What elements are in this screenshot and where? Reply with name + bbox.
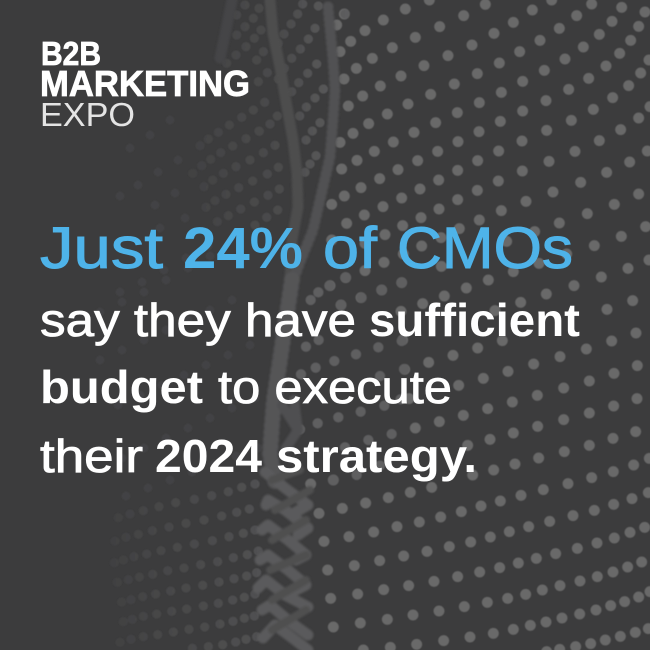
line: budget to execute: to execute (218, 361, 452, 413)
headline statistic: of (323, 216, 378, 281)
line: say they have sufficient: say they have (40, 294, 356, 346)
headline statistic (40, 216, 573, 281)
headline statistic: CMOs (397, 216, 573, 281)
logo: B2B Marketing Expo (40, 35, 250, 133)
logo line: MARKETING: MARKETING (40, 63, 250, 104)
line: their 2024 strategy.: strategy. (276, 430, 477, 482)
line: their 2024 strategy.: 2024 (155, 430, 262, 482)
line: say they have sufficient: sufficient (369, 294, 580, 346)
logo line: EXPO: EXPO (40, 96, 135, 133)
headline statistic: Just (40, 216, 163, 281)
headline statistic: 24% (183, 216, 303, 281)
line: their 2024 strategy. (40, 430, 477, 482)
DNA helix strands (220, 0, 335, 650)
line: budget to execute: budget (40, 361, 203, 413)
line: budget to execute (40, 361, 452, 413)
supporting text (40, 294, 580, 482)
logo line: B2B: B2B (41, 35, 101, 72)
line: say they have sufficient (40, 294, 580, 346)
line: their 2024 strategy.: their (40, 430, 143, 482)
